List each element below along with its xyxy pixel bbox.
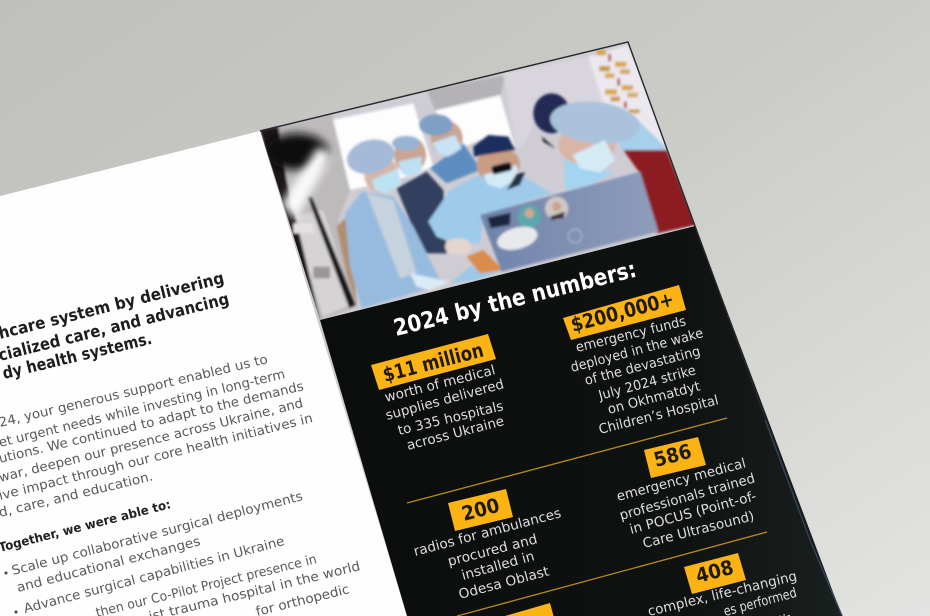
stat: 586: Care Ultrasound)	[641, 508, 756, 552]
window left	[332, 103, 433, 190]
stat: 200: 200	[459, 493, 502, 526]
stat: $200,000+	[563, 285, 720, 438]
list heading: Together, we were able to:	[0, 496, 172, 555]
divider line two	[457, 532, 767, 616]
left equipment wall	[260, 113, 357, 320]
ceiling band	[427, 75, 505, 111]
heading: hcare system by delivering	[0, 268, 226, 343]
heading: cialized care, and advancing	[0, 289, 231, 365]
stat: 200	[412, 489, 563, 603]
page edge	[260, 42, 842, 616]
man in blue scrubs	[419, 114, 480, 183]
stat: 586: emergency medical	[615, 455, 748, 505]
woman in red with blue cap	[533, 93, 697, 233]
stat: 586: in POCUS (Point-of-	[628, 488, 758, 538]
stat: $200,000+: of the devastating	[583, 343, 702, 389]
panel: white text page	[0, 131, 407, 616]
stat: $11 million	[371, 334, 506, 454]
panel: dark statistics background	[320, 226, 842, 616]
stat: $200,000+: emergency funds	[574, 313, 688, 356]
heading: dy health systems.	[1, 329, 154, 383]
panel: operating room photo	[260, 42, 697, 320]
stat: $11 million: supplies delivered	[384, 376, 506, 424]
stat: 200: radios for ambulances	[412, 505, 563, 560]
window right	[435, 95, 515, 150]
stat: 586: professionals trained	[618, 471, 757, 524]
blurred boom arm	[265, 133, 332, 220]
man with navy shirt	[392, 136, 447, 253]
bullet list	[4, 489, 362, 616]
intro paragraph: et urgent needs while investing in long-term	[0, 367, 287, 451]
stat: 408: 408	[693, 555, 736, 588]
nurse in blue gown	[337, 135, 450, 308]
stat: $11 million: $11 million	[380, 338, 486, 387]
right wall	[503, 57, 607, 150]
poster marks	[597, 50, 640, 113]
stat: $11 million: across Ukraine	[405, 413, 506, 454]
surgeon with loupes	[428, 135, 552, 255]
intro paragraph: d, care, and education.	[0, 469, 155, 521]
heading: 2024 by the numbers: 2024 by the numbers:	[391, 257, 639, 342]
intro paragraph: 24, your generous support enabled us to	[0, 352, 269, 431]
stat: 586: 586	[651, 439, 694, 472]
stat: $11 million: worth of medical	[383, 362, 497, 406]
stat: 200: Odesa Oblast	[457, 563, 551, 603]
wall poster	[588, 45, 666, 148]
stat: $200,000+: deployed in the wake	[569, 325, 705, 376]
stat: 200: procured and	[446, 531, 539, 570]
stat: $11 million: to 335 hospitals	[396, 398, 505, 439]
stat: partially visible yellow box	[505, 603, 556, 616]
stat: 586	[615, 437, 758, 552]
stat: $200,000+: Children’s Hospital	[597, 392, 720, 438]
stat: $200,000+: July 2024 strike	[596, 363, 698, 404]
intro paragraph: ive impact through our core health initiatives in	[0, 411, 314, 504]
bullet list: and educational exchanges	[15, 534, 202, 596]
stat: 200: installed in	[460, 548, 536, 584]
bullet list: Scale up collaborative surgical deployments	[10, 489, 305, 579]
laptop with stickers	[480, 172, 658, 272]
divider line one	[407, 418, 727, 503]
stat: $200,000+: $200,000+	[568, 287, 676, 337]
intro paragraph: war, deepen our presence across Ukraine, and	[0, 396, 305, 486]
stat: $200,000+: on Okhmatdyt	[606, 378, 702, 418]
intro paragraph	[0, 352, 314, 521]
heading	[0, 268, 231, 383]
bullet list: Advance surgical capabilities in Ukraine	[22, 534, 286, 616]
intro paragraph: utions. We continued to adapt to the demands	[0, 379, 305, 467]
patient area	[450, 250, 503, 283]
